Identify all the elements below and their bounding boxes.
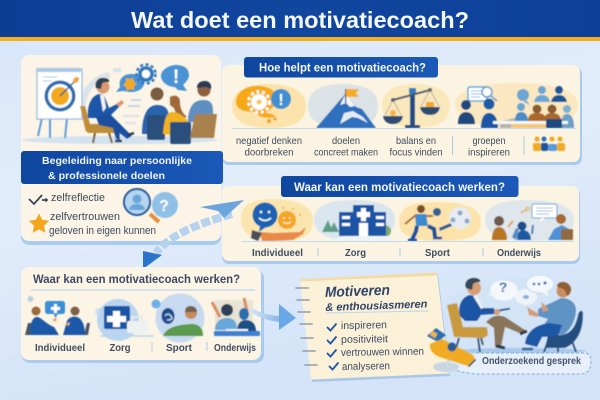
icon: onderwijs xyxy=(485,200,574,241)
arrow: naar notitieblok xyxy=(250,304,296,330)
text: zelfreflectie: zelfreflectie xyxy=(51,192,105,204)
text: zelfvertrouwen: zelfvertrouwen xyxy=(50,211,120,223)
text: zelfvertrouwen: geloven in eigen kunnen xyxy=(49,225,156,237)
labels xyxy=(252,247,541,259)
labels: doorbreken xyxy=(244,148,294,158)
labels: Zorg xyxy=(345,247,366,259)
label: onderzoekend gesprek xyxy=(444,353,591,374)
labels: groepen xyxy=(472,136,506,147)
labels: Onderwijs xyxy=(497,247,541,259)
panel: gesprek xyxy=(440,275,592,354)
kop: Motiveren xyxy=(325,283,390,301)
labels: Individueel xyxy=(252,247,303,259)
icon: sport xyxy=(399,202,481,241)
labels: Individueel xyxy=(35,342,85,354)
bubbles xyxy=(486,275,554,305)
icon: doelen concreet maken xyxy=(308,84,378,128)
panel: begeleiding xyxy=(21,55,223,245)
icon: check xyxy=(29,195,47,204)
checklist: inspireren xyxy=(341,319,387,332)
heading xyxy=(281,176,518,197)
icon: individueel xyxy=(25,296,90,335)
heading: Waar kan een motivatiecoach werken? xyxy=(294,182,505,194)
labels: inspireren xyxy=(468,148,510,158)
icon: groepen inspireren xyxy=(455,83,578,128)
labels: Sport xyxy=(425,247,450,259)
title banner xyxy=(0,0,600,41)
kop: & enthousiasmeren xyxy=(325,298,428,314)
icon: star xyxy=(29,214,49,233)
banner: begeleiding: & professionele doelen xyxy=(48,170,165,182)
icon: balans en focus vinden xyxy=(382,84,450,128)
labels: concreet maken xyxy=(314,148,378,158)
coach rechts xyxy=(556,284,570,298)
heading: Hoe helpt een motivatiecoach? xyxy=(259,62,426,74)
stoel rechts xyxy=(545,311,583,348)
icon: sport xyxy=(152,294,204,342)
arrow: gebogen pijl xyxy=(143,200,244,269)
checklist: vertrouwen winnen xyxy=(341,346,424,359)
illustration: coach met groep: ! xyxy=(173,67,179,88)
kop xyxy=(325,281,428,314)
icon: negatief denken doorbreken xyxy=(232,84,306,128)
stoel links xyxy=(447,303,488,338)
bubbles xyxy=(116,74,144,92)
labels: Onderwijs xyxy=(214,342,256,354)
coach links xyxy=(467,281,481,295)
labels xyxy=(35,342,256,354)
ringen xyxy=(296,288,317,365)
illustration: coach met groep xyxy=(22,64,218,144)
checklist: analyseren xyxy=(342,360,390,373)
text: zelfvertrouwen xyxy=(49,211,156,237)
labels: Zorg xyxy=(110,342,130,354)
labels: Sport xyxy=(166,342,192,354)
icon: negatief denken doorbreken: ! xyxy=(278,92,284,109)
checklist: positiviteit xyxy=(341,333,388,346)
listeners xyxy=(150,88,164,100)
panel: waar kan links xyxy=(21,267,264,363)
icon: onderwijs xyxy=(212,298,260,336)
panel: waar kan een motivatiecoach werken rechts xyxy=(222,176,580,264)
labels: focus vinden xyxy=(390,148,442,158)
banner: begeleiding xyxy=(21,151,223,184)
heading xyxy=(244,57,438,78)
banner: begeleiding: Begeleiding naar persoonlijke xyxy=(42,155,192,167)
flipchart xyxy=(36,68,82,138)
labels: balans en xyxy=(396,136,436,147)
icon: small group xyxy=(533,136,565,151)
label: onderzoekend gesprek: Onderzoekend gesprek xyxy=(482,355,581,367)
icon: fluit xyxy=(427,328,476,372)
labels: doelen xyxy=(332,136,360,147)
panel: hoe helpt een motivatiecoach xyxy=(222,57,582,165)
notitieblok xyxy=(296,272,450,382)
icon: individueel xyxy=(241,199,313,241)
bubbles: ? xyxy=(499,279,507,295)
checklist xyxy=(327,319,424,373)
icon: zorg xyxy=(95,299,154,341)
title: Wat doet een motivatiecoach? xyxy=(131,7,469,33)
labels: negatief denken xyxy=(236,136,302,147)
icon: zorg xyxy=(314,200,395,241)
icon: magnifier: ? xyxy=(159,198,169,215)
heading: Waar kan een motivatiecoach werken? xyxy=(33,274,240,286)
labels xyxy=(236,136,510,158)
icon: magnifier xyxy=(124,189,178,222)
coach xyxy=(80,106,115,133)
